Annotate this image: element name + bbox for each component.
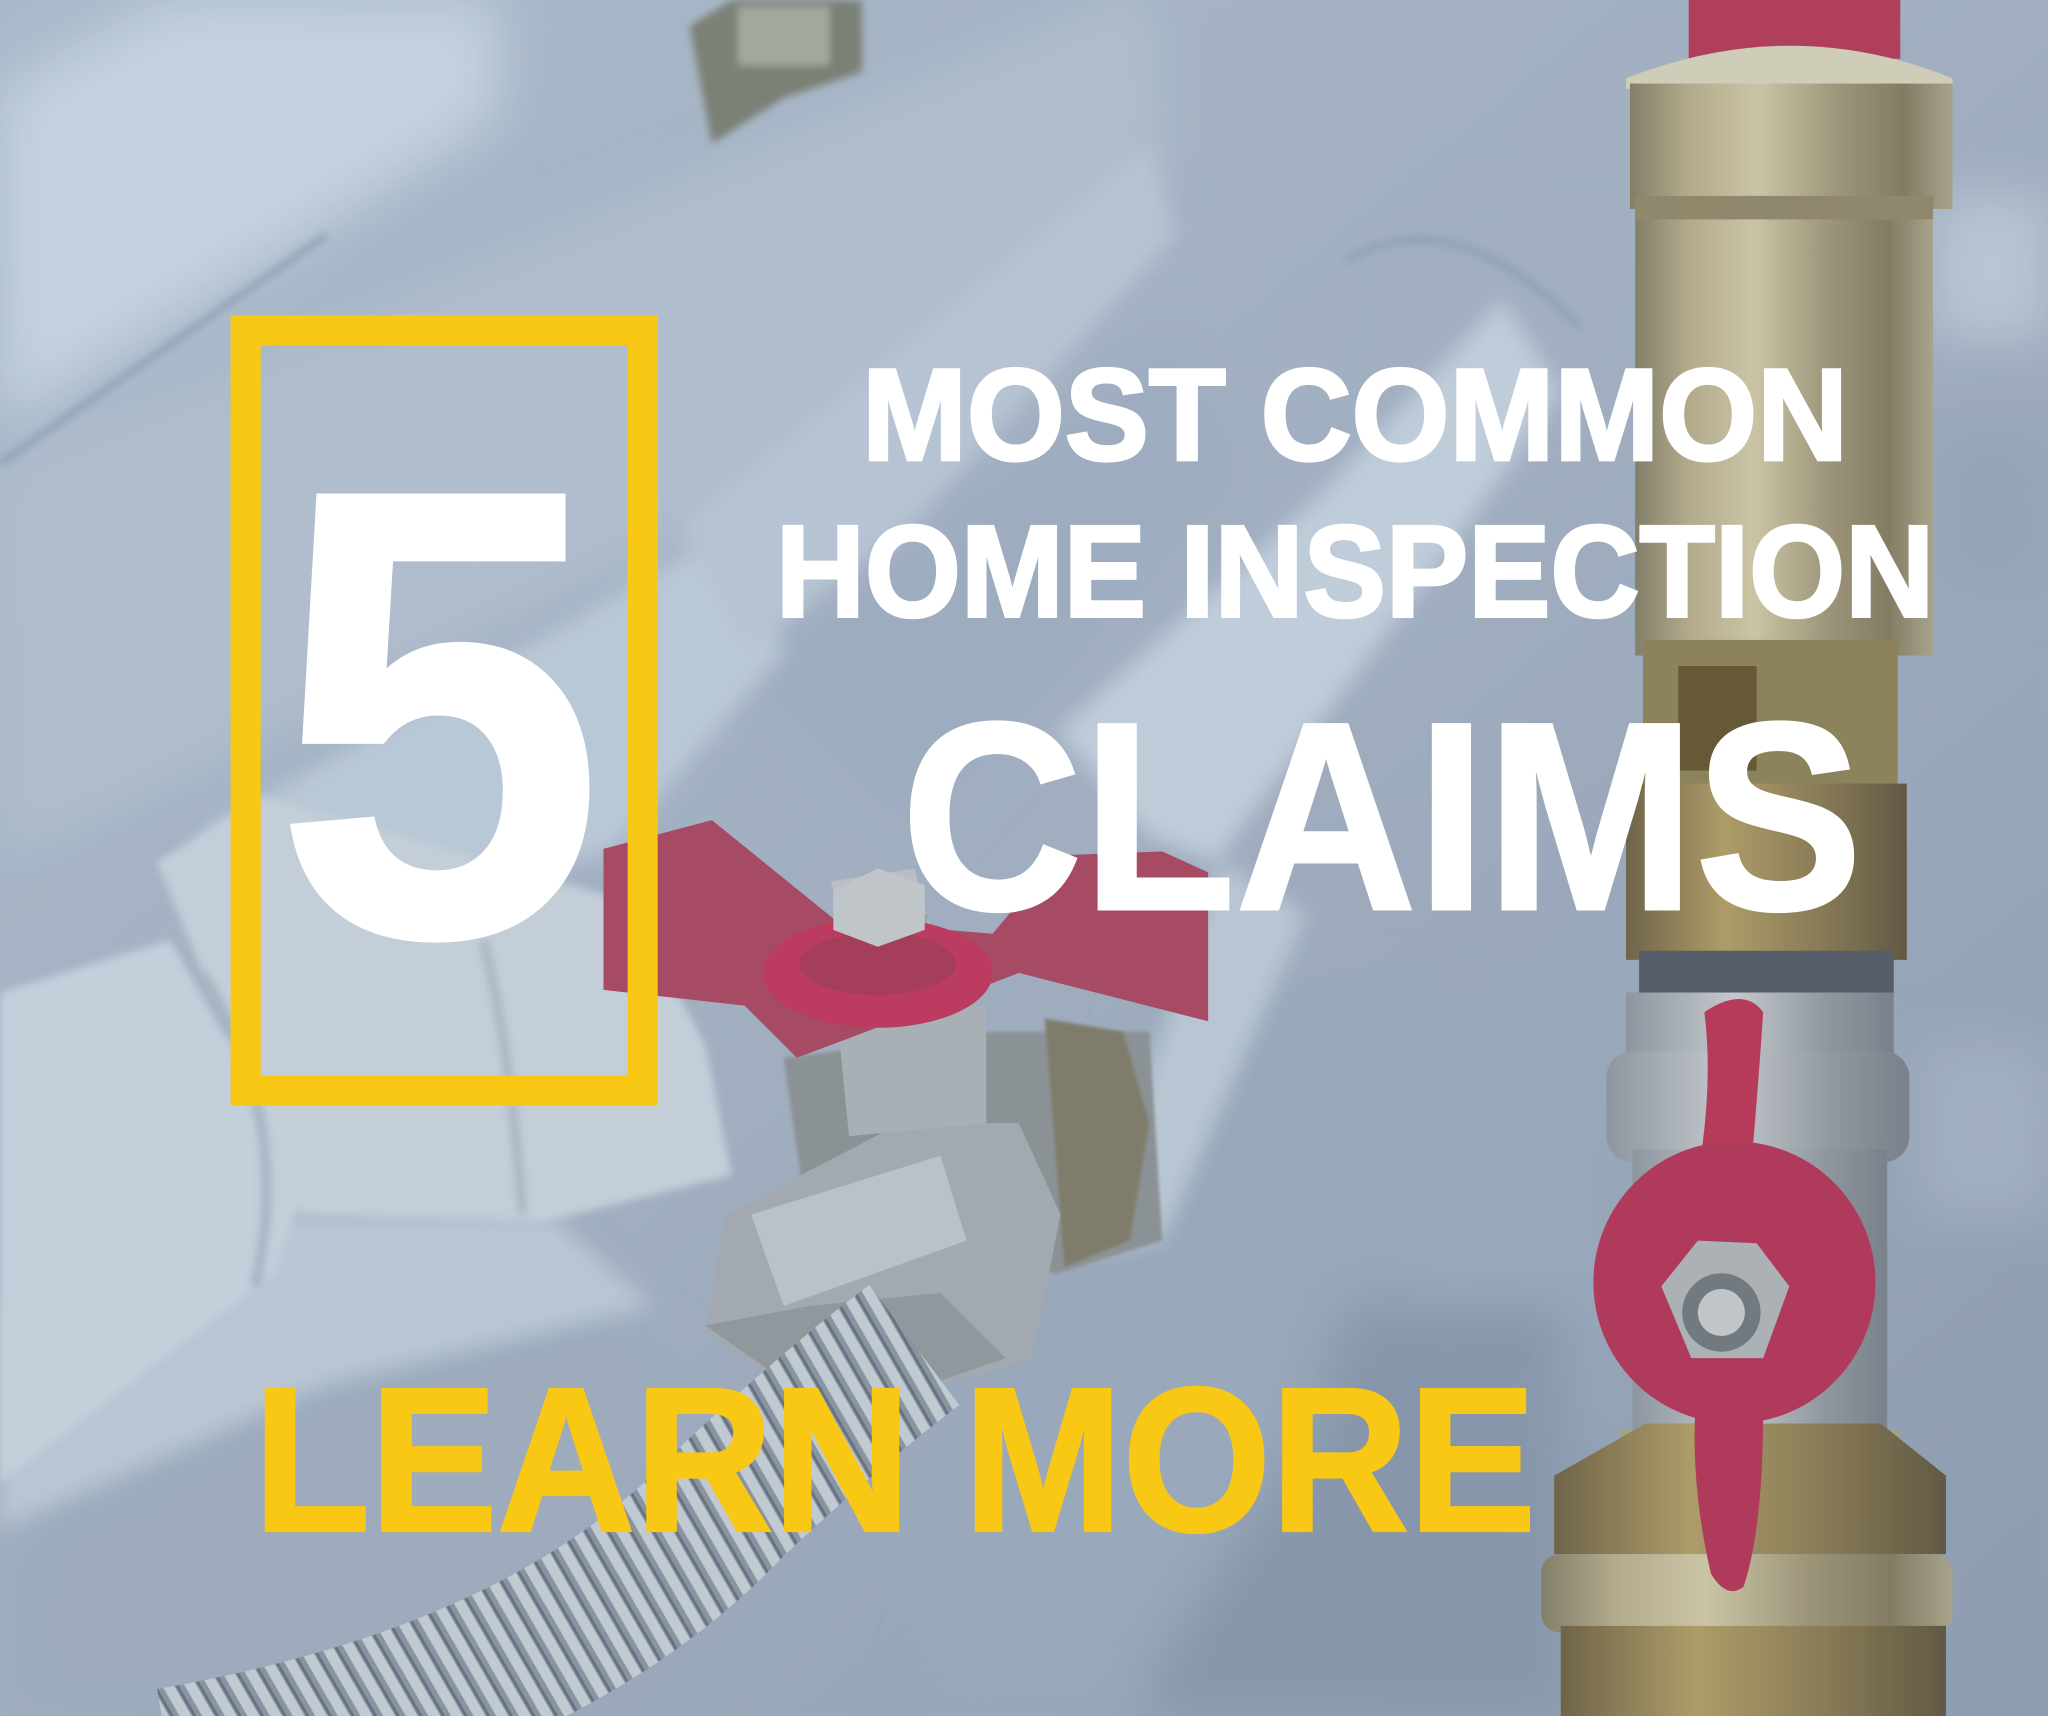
title line: home inspection: HOME INSPECTION	[776, 498, 1934, 644]
title	[776, 342, 1934, 966]
lower left pipe	[0, 797, 731, 1482]
central diagonal pipes	[0, 144, 1561, 1528]
title line: claims: CLAIMS	[901, 667, 1862, 966]
brass and steel valve column	[1541, 0, 1953, 1716]
yellow frame around number	[246, 330, 643, 1090]
red butterfly handle	[603, 820, 1208, 1058]
title line: most common: MOST COMMON	[862, 342, 1848, 488]
horizontal valve body	[705, 868, 1162, 1417]
big number 5: 5	[273, 356, 605, 1071]
flexible hose	[170, 1345, 914, 1716]
call to action: LEARN MORE	[253, 1346, 1536, 1575]
red tap handle	[1698, 999, 1763, 1175]
top fitting	[690, 0, 862, 144]
